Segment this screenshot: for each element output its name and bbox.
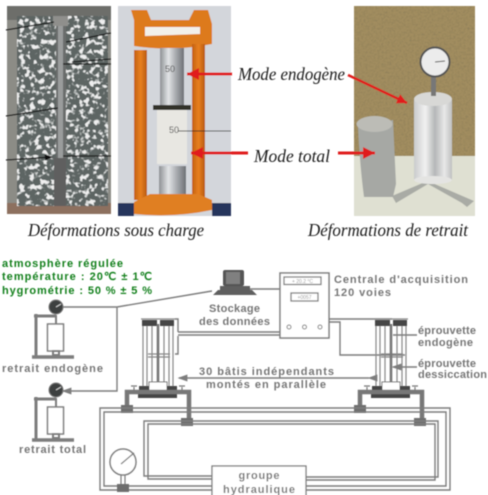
label: Centrale d'acquisition (334, 274, 468, 299)
photo: orange loading frame: 50 (165, 64, 175, 74)
photo: shrinkage cylinders with dial gauge (354, 6, 475, 216)
panel: data logger: + 20.2 °C (292, 279, 313, 285)
label: éprouvette dessiccation: éprouvette (418, 358, 476, 370)
label: éprouvette dessiccation (418, 358, 487, 381)
arrows: specimen pointers (393, 335, 417, 367)
panel: data logger (280, 273, 329, 338)
figure: right test frame (354, 319, 426, 426)
photo: orange loading frame (118, 6, 231, 216)
label: Mode endogène: Mode endogène (237, 64, 345, 84)
figure: left test frame (121, 319, 193, 426)
panel: acquisition and hydraulic schematic (2, 258, 487, 495)
text: regulated atmosphere: température : 20℃ ± 1℃ (2, 271, 152, 283)
hydraulic pipes (100, 408, 450, 490)
label: 30 bâtis: montés en parallèle (206, 379, 326, 391)
caption: shrinkage: Déformations de retrait (307, 220, 469, 240)
label: Centrale d'acquisition: 120 voies (334, 287, 391, 299)
label: retrait endogène: retrait endogène (2, 363, 103, 375)
text: regulated atmosphere (2, 258, 152, 297)
photo: orange loading frame: 50 (169, 125, 179, 135)
text: regulated atmosphere: atmosphère régulée (2, 258, 123, 270)
label: 30 bâtis: 30 bâtis indépendants (199, 366, 334, 378)
label: Stockage des données (199, 303, 270, 328)
arrow: red to total mode, photo 2 (191, 152, 248, 154)
arrow: red to endogenous mode, photo 3 (348, 75, 407, 103)
photo: concrete specimens under load (6, 6, 111, 214)
panel: data logger: +0057 (297, 295, 312, 301)
arrow: between frames (179, 377, 369, 379)
icon: pressure gauge (110, 449, 136, 492)
arrow: red to total mode, photo 3 (338, 152, 375, 154)
label: éprouvette dessiccation: dessiccation (418, 369, 487, 381)
connectors: logger wiring (175, 289, 405, 355)
box: hydraulic unit (212, 466, 306, 495)
label: Mode total: Mode total (253, 146, 330, 166)
label: Centrale d'acquisition: Centrale d'acquisition (334, 274, 468, 286)
icon: endogenous shrinkage stand (32, 300, 74, 357)
box: hydraulic unit: groupe (238, 470, 280, 482)
label: Stockage des données: des données (199, 316, 270, 328)
label: 30 bâtis (199, 366, 334, 391)
label: retrait total: retrait total (19, 444, 86, 456)
label: éprouvette endogène (418, 325, 476, 349)
panel: photos of test specimens (6, 6, 475, 240)
icon: total shrinkage stand (32, 383, 74, 440)
caption: under load: Déformations sous charge (27, 220, 204, 240)
text: regulated atmosphere: hygrométrie : 50 % ± 5 % (2, 285, 152, 297)
label: éprouvette endogène: endogène (418, 337, 473, 349)
arrow: gauges to data storage (63, 291, 212, 391)
label: Stockage des données: Stockage (209, 303, 260, 315)
label: éprouvette endogène: éprouvette (418, 325, 476, 337)
arrow: red to endogenous mode, photo 2 (187, 72, 232, 76)
icon: computer (213, 270, 257, 295)
